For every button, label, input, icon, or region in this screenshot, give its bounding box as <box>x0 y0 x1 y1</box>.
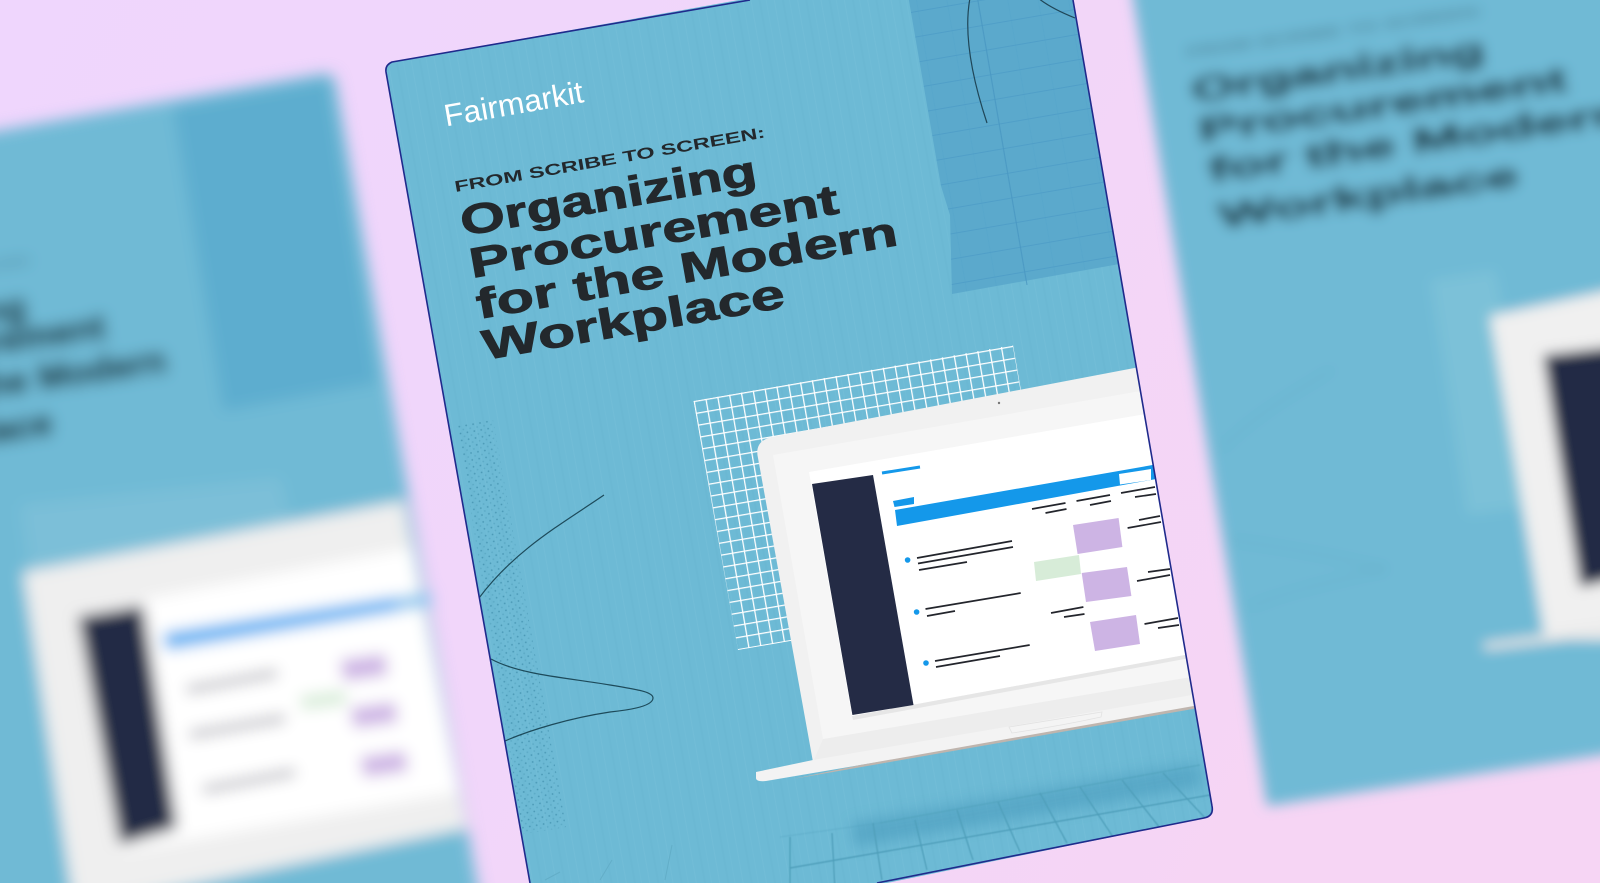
search box <box>1119 469 1151 484</box>
cover fill <box>370 0 1230 883</box>
title: Workplace <box>478 269 788 369</box>
green cell <box>1034 555 1081 581</box>
blurred cover: left <box>0 74 480 883</box>
blurred right heading: Procurement <box>1196 61 1569 150</box>
title <box>462 162 896 359</box>
torn grid panel <box>908 0 1125 294</box>
row bullets <box>905 557 910 563</box>
blurred left grid <box>20 478 300 575</box>
blue title line <box>882 467 920 473</box>
blurred left grid panel <box>173 80 377 411</box>
cover border <box>386 0 1212 883</box>
blurred right heading: Organizing <box>1189 31 1487 110</box>
blurred right page <box>1130 0 1600 806</box>
blurred left page <box>0 74 480 883</box>
sidebar <box>812 475 914 715</box>
laptop base <box>756 700 1194 782</box>
blurred left heading <box>0 255 169 467</box>
blurred right grid panel <box>1430 270 1545 515</box>
title: Organizing <box>456 146 760 245</box>
book cover <box>370 0 1250 883</box>
camera dot <box>998 402 1000 404</box>
laptop lid <box>757 368 1189 760</box>
table lines <box>917 487 1179 667</box>
logo: Fairmarkit <box>441 74 586 133</box>
blurred right heading: Workplace <box>1216 156 1521 236</box>
eyebrow: FROM SCRIBE TO SCREEN: <box>453 124 766 196</box>
blurred right heading: for the Modern <box>1206 93 1600 190</box>
title: for the Modern <box>472 207 901 328</box>
blurred right heading <box>1186 5 1600 236</box>
curve lines <box>479 495 653 741</box>
purple cells <box>1073 518 1122 554</box>
top curves <box>968 0 1075 123</box>
laptop bezel <box>773 372 1250 739</box>
blurred left laptop <box>23 501 466 883</box>
blurred right heading: FROM SCRIBE TO SCREEN: <box>1186 5 1484 59</box>
title: Procurement <box>465 176 842 287</box>
laptop lower band <box>813 667 1250 762</box>
laptop <box>756 368 1194 782</box>
screen <box>809 414 1185 716</box>
blue bar <box>895 465 1155 526</box>
blue chip <box>893 497 914 507</box>
floor grid and shadow <box>545 765 1210 883</box>
trackpad notch <box>1009 712 1102 733</box>
white grid <box>694 345 1057 650</box>
dot strip <box>457 420 566 834</box>
blurred right curves <box>1220 369 1387 608</box>
blurred right laptop <box>1490 288 1600 640</box>
blurred cover: right <box>1130 0 1600 806</box>
